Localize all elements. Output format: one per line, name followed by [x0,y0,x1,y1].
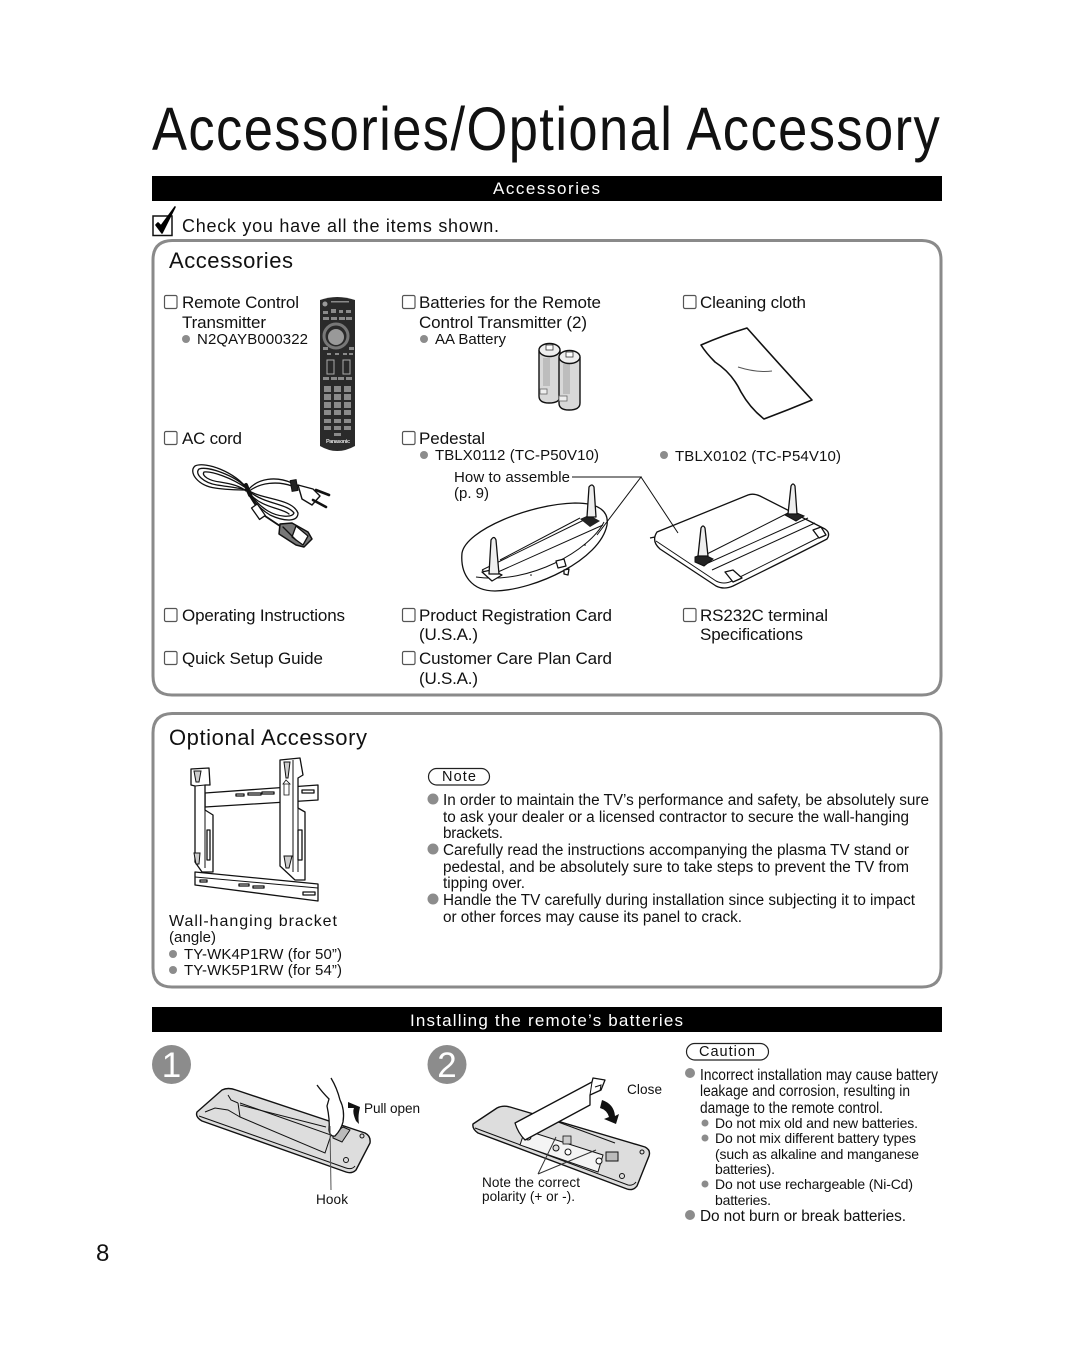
callout: how to assemble [454,469,570,502]
icon: AA batteries [539,344,580,410]
label: polarity note [482,1175,580,1204]
icon: remote control: Panasonic [326,439,350,445]
note text: tipping over. [443,875,525,892]
item: pedestal: Pedestal [419,429,485,448]
panel heading: Optional Accessory [169,725,367,750]
panel: optional accessory [153,714,941,987]
caution text: batteries). [715,1161,775,1177]
title: Accessories/Optional Accessory [152,95,940,164]
note pill [428,768,490,785]
item: RS232C terminal: RS232C terminal [700,606,828,625]
note text: to ask your dealer or a licensed contractor to secure the wall-hanging [443,809,909,826]
label: polarity note: polarity (+ or -). [482,1189,575,1204]
polarity leader lines [538,1137,596,1174]
label: polarity note: Note the correct [482,1175,580,1190]
illustration: step 2 remote [473,1078,650,1190]
callout: how to assemble: How to assemble [454,469,570,486]
hand [317,1078,344,1136]
item: customer care plan card: Customer Care Plan Card [419,649,612,668]
bracket label: (angle) [169,929,216,946]
item: pedestal [402,429,841,465]
item: customer care plan card [402,649,612,688]
note text: Handle the TV carefully during installation since subjecting it to impact [443,892,916,909]
item: batteries: Batteries for the Remote [419,293,601,312]
item: quick setup guide: Quick Setup Guide [182,649,323,668]
check instruction [153,207,499,236]
callout: how to assemble: (p. 9) [454,485,489,502]
step 2 badge: 2 [437,1046,457,1085]
item: RS232C terminal: Specifications [700,625,803,644]
battery cover [515,1078,605,1140]
step 2 badge [428,1045,466,1085]
caution text: (such as alkaline and manganese [715,1146,919,1162]
caution text: damage to the remote control. [700,1100,883,1117]
section bar: installing batteries [152,1007,942,1032]
illustration: oval pedestal [462,485,607,591]
caution text [685,1067,938,1225]
panel heading: Accessories [169,248,293,273]
label: close: Close [627,1082,662,1097]
item: operating instructions: Operating Instructions [182,606,345,625]
caution pill [686,1044,768,1060]
note text: or other forces may cause its panel to crack. [443,909,742,926]
page number: 8 [96,1240,109,1267]
item: remote control: Remote Control [182,293,299,312]
caution text: batteries. [715,1192,771,1208]
caution text: leakage and corrosion, resulting in [700,1083,910,1100]
caution text: Do not mix old and new batteries. [715,1115,918,1131]
item: batteries: Control Transmitter (2) [419,313,587,332]
caution text: Do not use rechargeable (Ni-Cd) [715,1176,913,1192]
caution pill: Caution [699,1044,755,1060]
caution text: Do not mix different battery types [715,1130,916,1146]
item: product registration card [402,606,612,644]
step 1 badge: 1 [162,1046,181,1085]
note pill: Note [442,769,476,785]
section bar: installing batteries: Installing the remote’s batteries [410,1011,683,1030]
note text [428,792,929,926]
panel: accessories [153,240,941,695]
item: product registration card: Product Registration Card [419,606,612,625]
bracket label [169,913,342,979]
note text: pedestal, and be absolutely sure to take steps to prevent the TV from [443,859,909,876]
arrow: pull open [348,1102,360,1124]
bracket label: TY-WK5P1RW (for 54”) [184,962,342,979]
item: batteries: AA Battery [435,331,506,348]
caution text: Do not burn or break batteries. [700,1208,906,1225]
illustration: wall-hanging bracket [191,758,318,901]
illustration: step 1 remote [197,1078,370,1190]
check instruction: Check you have all the items shown. [182,216,499,236]
bracket label: TY-WK4P1RW (for 50”) [184,946,342,963]
leader lines [572,477,678,535]
icon: AC cord [193,465,329,547]
bracket label: Wall-hanging bracket [169,913,338,930]
label: pull open: Pull open [364,1101,420,1116]
item: AC cord: AC cord [182,429,242,448]
icon: remote control [320,297,355,451]
section bar: accessories [152,176,942,201]
item: batteries [402,293,601,348]
label: hook: Hook [316,1192,348,1207]
item: remote control: Transmitter [182,313,266,332]
item: RS232C terminal [684,606,828,644]
illustration: rectangular pedestal [650,484,829,588]
note text: brackets. [443,825,503,842]
section bar: accessories: Accessories [493,179,600,198]
icon: cleaning cloth [701,328,812,419]
item: pedestal: TBLX0112 (TC-P50V10) [435,447,599,464]
note text: Carefully read the instructions accompanying the plasma TV stand or [443,842,909,859]
item: remote control [164,293,308,348]
item: remote control: N2QAYB000322 [197,331,308,348]
step 1 badge [152,1045,191,1085]
item: cleaning cloth: Cleaning cloth [700,293,806,312]
item: customer care plan card: (U.S.A.) [419,669,478,688]
caution text: Incorrect installation may cause battery [700,1067,938,1084]
note text: In order to maintain the TV’s performance and safety, be absolutely sure [443,792,929,809]
item: pedestal: TBLX0102 (TC-P54V10) [675,448,841,465]
arrow: close [600,1100,619,1124]
item: product registration card: (U.S.A.) [419,625,478,644]
